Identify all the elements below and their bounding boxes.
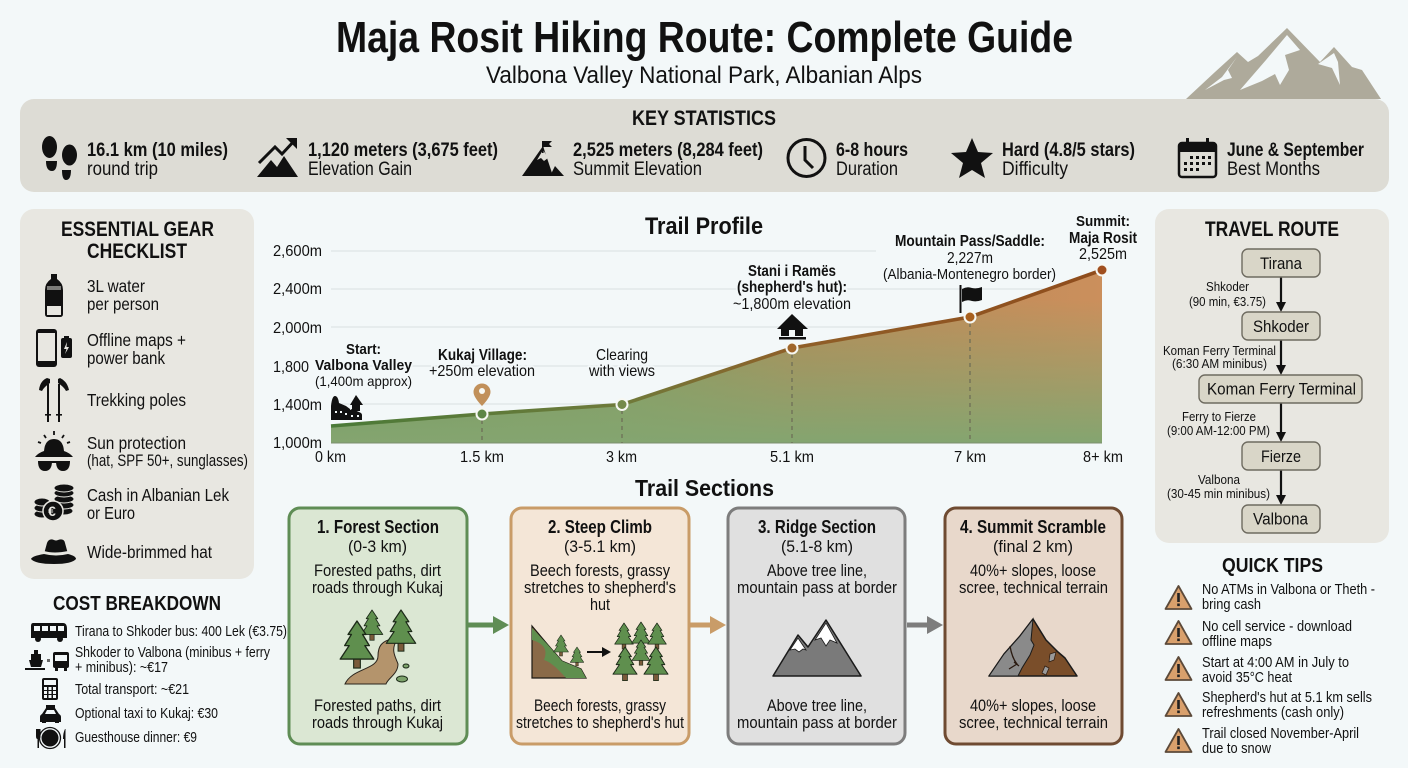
annotation: start: Valbona Valley: [315, 357, 413, 374]
panel: forest section: (0-3 km): [348, 537, 407, 556]
panel: key statistics: [20, 99, 1389, 192]
icon: forest path: [340, 610, 416, 684]
x axis labels: 0 km: [315, 449, 346, 466]
gear: wide-brimmed hat: [31, 539, 212, 564]
route leg labels: (30-45 min minibus): [1167, 486, 1270, 501]
panel: summit scramble: (final 2 km): [993, 537, 1073, 556]
gear: water: [45, 274, 159, 317]
tip: ATMs: No ATMs in Valbona or Theth -: [1202, 581, 1375, 598]
annotation: summit: 2,525m: [1079, 246, 1127, 263]
y axis labels: 2,400m: [273, 281, 322, 298]
arrow: steep climb to ridge: [690, 616, 726, 634]
annotation: summit: [1069, 213, 1138, 263]
icon: decorative mountain: [1186, 28, 1381, 99]
heading: essential gear: [61, 218, 214, 263]
panel: ridge section: mountain pass at border: [737, 713, 897, 732]
panel: summit scramble: scree, technical terrain: [959, 578, 1108, 597]
stat: summit elevation: [522, 140, 763, 180]
stop: Koman Ferry Terminal: Koman Ferry Terminal: [1207, 380, 1356, 398]
elevation area: [331, 270, 1102, 443]
tip: trail closure: [1166, 725, 1359, 757]
icon: hut: [777, 314, 808, 340]
annotation: summit: Maja Rosit: [1069, 230, 1138, 247]
cost: dinner: Guesthouse dinner: €9: [75, 729, 197, 746]
stat: best months: Best Months: [1227, 159, 1320, 180]
panel: essential gear checklist: [20, 209, 254, 579]
panel: ridge section: Above tree line,: [767, 561, 867, 580]
heading: travel route: TRAVEL ROUTE: [1205, 218, 1339, 241]
panel: ridge section: (5.1-8 km): [781, 537, 853, 556]
gear: maps and power bank: power bank: [87, 348, 165, 368]
tip: shepherd's hut: Shepherd's hut at 5.1 km sells: [1202, 689, 1372, 706]
cost: bus: [31, 623, 287, 642]
annotation: shepherd's hut: (shepherd's hut):: [737, 279, 847, 296]
annotation: kukaj village: +250m elevation: [429, 363, 535, 380]
icon: location pin: [474, 384, 490, 406]
subtitle: Valbona Valley National Park, Albanian Alps: [486, 62, 922, 89]
title: Maja Rosit Hiking Route: Complete Guide: [336, 13, 1073, 62]
stat: difficulty: [951, 138, 1135, 180]
route leg labels: (9:00 AM-12:00 PM): [1167, 423, 1270, 438]
stop: Shkoder: Shkoder: [1253, 317, 1309, 336]
stat: duration: Duration: [836, 159, 898, 180]
tip: ATMs: [1166, 581, 1375, 613]
waypoint markers: [476, 264, 1108, 420]
gear: trekking poles: Trekking poles: [87, 390, 186, 410]
y axis labels: 1,800: [273, 359, 309, 376]
tip: shepherd's hut: [1166, 689, 1372, 721]
annotation: mountain pass: (Albania-Montenegro border): [883, 266, 1056, 283]
stop: Tirana: Tirana: [1260, 254, 1302, 273]
stat: best months: June & September: [1227, 140, 1364, 161]
gear: wide-brimmed hat: Wide-brimmed hat: [87, 542, 212, 562]
stat: elevation gain: [257, 138, 498, 180]
annotation: start: [315, 341, 413, 389]
x axis labels: 8+ km: [1083, 449, 1123, 466]
tip: trail closure: Trail closed November-April: [1202, 725, 1359, 742]
panel: forest section: roads through Kukaj: [312, 713, 443, 732]
tip: early start: avoid 35°C heat: [1202, 669, 1293, 686]
panel: steep climb: [511, 508, 689, 744]
tip: cell service: [1166, 618, 1352, 650]
panel: steep climb: (3-5.1 km): [564, 537, 636, 556]
cost: minibus and ferry: Shkoder to Valbona (minibus + ferry: [75, 644, 270, 661]
heading: trail profile: Trail Profile: [645, 213, 763, 240]
stat: distance: 16.1 km (10 miles): [87, 140, 228, 161]
cost: minibus and ferry: + minibus): ~€17: [75, 659, 168, 676]
panel: cost breakdown: [25, 593, 287, 748]
annotation: kukaj village: Kukaj Village:: [438, 347, 527, 364]
icon: snowy ridge: [773, 620, 861, 676]
gear: cash: €: [48, 503, 56, 519]
heading: essential gear: CHECKLIST: [87, 240, 187, 263]
stop: Koman Ferry Terminal: [1199, 375, 1362, 403]
route arrows: [1276, 277, 1286, 505]
icon: steep slope and trees: [532, 622, 668, 681]
tip: early start: [1166, 654, 1349, 686]
cost: total transport: [42, 678, 189, 700]
gear: sun protection: [35, 431, 248, 471]
gear: water: per person: [87, 294, 159, 314]
gear: cash: or Euro: [87, 503, 135, 523]
stop: Shkoder: [1242, 312, 1320, 340]
route leg labels: [1163, 279, 1276, 501]
panel: steep climb: Beech forests, grassy: [530, 561, 670, 580]
gear: sun protection: Sun protection: [87, 433, 186, 453]
stat: distance: round trip: [87, 159, 158, 180]
stat: difficulty: Hard (4.8/5 stars): [1002, 140, 1135, 161]
panel: summit scramble: 40%+ slopes, loose: [970, 696, 1096, 715]
panel: summit scramble: 40%+ slopes, loose: [970, 561, 1096, 580]
stat: elevation gain: Elevation Gain: [308, 159, 412, 180]
tip: early start: Start at 4:00 AM in July to: [1202, 654, 1349, 671]
panel: ridge section: mountain pass at border: [737, 578, 897, 597]
gear: sun protection: (hat, SPF 50+, sunglasses): [87, 452, 248, 470]
panel: summit scramble: [945, 508, 1122, 744]
panel: steep climb: 2. Steep Climb: [548, 517, 652, 537]
y axis labels: [273, 243, 322, 452]
heading: trail sections: Trail Sections: [635, 475, 774, 501]
x axis labels: 5.1 km: [770, 449, 814, 466]
panel: summit scramble: scree, technical terrain: [959, 713, 1108, 732]
arrow: forest to steep climb: [468, 616, 509, 634]
stop: Fierze: [1242, 442, 1320, 470]
annotation: kukaj village: [429, 347, 535, 380]
panel: steep climb: Beech forests, grassy: [534, 696, 666, 715]
panel: ridge section: [728, 508, 905, 744]
y axis labels: 2,600m: [273, 243, 322, 260]
y axis labels: 1,400m: [273, 397, 322, 414]
panel: ridge section: Above tree line,: [767, 696, 867, 715]
arrow: ridge to summit: [907, 616, 943, 634]
stat: best months: [1179, 138, 1364, 180]
icon: rocky summit: [989, 619, 1077, 676]
annotation: clearing with views: Clearing: [596, 347, 648, 364]
annotation: mountain pass: Mountain Pass/Saddle:: [895, 233, 1045, 250]
stat: distance: [42, 136, 228, 180]
stop: Valbona: [1242, 505, 1320, 533]
cost: dinner: [36, 728, 197, 748]
stat: duration: [788, 140, 908, 180]
cost: taxi: [40, 705, 218, 723]
stop: Fierze: Fierze: [1261, 447, 1301, 466]
annotation: start: (1,400m approx): [315, 373, 412, 389]
route leg labels: Koman Ferry Terminal: [1163, 343, 1276, 358]
x axis labels: 3 km: [606, 449, 637, 466]
heading: essential gear: ESSENTIAL GEAR: [61, 218, 214, 241]
panel: quick tips: [1166, 555, 1375, 757]
route leg labels: (6:30 AM minibus): [1172, 356, 1267, 371]
annotation: shepherd's hut: [733, 263, 851, 313]
annotation: start: Start:: [346, 341, 381, 358]
y axis labels: 1,000m: [273, 435, 322, 452]
annotation: clearing with views: with views: [588, 363, 655, 380]
stat: duration: 6-8 hours: [836, 140, 908, 161]
route leg labels: Valbona: [1198, 472, 1241, 487]
chart: trail profile: [273, 213, 1138, 466]
cost: minibus and ferry: [25, 644, 270, 676]
panel: summit scramble: 4. Summit Scramble: [960, 517, 1106, 537]
annotation: summit: Summit:: [1076, 213, 1130, 230]
x axis labels: 7 km: [954, 449, 986, 466]
annotation: clearing with views: [588, 347, 655, 380]
stop: Tirana: [1242, 249, 1320, 277]
cost: total transport: Total transport: ~€21: [75, 681, 189, 698]
y axis labels: 2,000m: [273, 320, 322, 337]
icon: village: [331, 395, 363, 420]
elevation line: [331, 270, 1102, 426]
stat: elevation gain: 1,120 meters (3,675 feet): [308, 140, 498, 161]
heading: quick tips: QUICK TIPS: [1222, 555, 1323, 577]
stat: summit elevation: 2,525 meters (8,284 feet): [573, 140, 763, 161]
tip: ATMs: bring cash: [1202, 596, 1261, 613]
panel: forest section: Forested paths, dirt: [314, 696, 441, 715]
tip: shepherd's hut: refreshments (cash only): [1202, 704, 1344, 721]
annotation: shepherd's hut: Stani i Ramës: [748, 263, 836, 280]
heading: key statistics: KEY STATISTICS: [632, 107, 776, 130]
stat: summit elevation: Summit Elevation: [573, 159, 702, 180]
route leg labels: (90 min, €3.75): [1189, 294, 1266, 309]
cost: bus: Tirana to Shkoder bus: 400 Lek (€3.75): [75, 623, 287, 640]
annotation: mountain pass: [883, 233, 1056, 283]
x axis labels: 1.5 km: [460, 449, 504, 466]
cost: taxi: Optional taxi to Kukaj: €30: [75, 705, 218, 722]
annotation: mountain pass: 2,227m: [947, 250, 993, 267]
stop: Valbona: Valbona: [1253, 510, 1308, 528]
stat: difficulty: Difficulty: [1002, 159, 1068, 180]
panel: ridge section: 3. Ridge Section: [758, 517, 876, 537]
panel: forest section: 1. Forest Section: [317, 517, 439, 537]
panel: forest section: [289, 508, 467, 744]
gear: maps and power bank: [36, 329, 186, 368]
route leg labels: Ferry to Fierze: [1182, 409, 1256, 424]
icon: flag: [960, 285, 982, 313]
gear: maps and power bank: Offline maps +: [87, 330, 186, 350]
gear: trekking poles: [39, 378, 186, 422]
panel: forest section: Forested paths, dirt: [314, 561, 441, 580]
gear: cash: [34, 484, 229, 523]
gear: water: 3L water: [87, 276, 145, 296]
route leg labels: Shkoder: [1206, 279, 1250, 294]
gear: cash: Cash in Albanian Lek: [87, 485, 229, 505]
panel: steep climb: hut: [590, 595, 610, 614]
panel: travel route: [1155, 209, 1389, 543]
tip: cell service: offline maps: [1202, 633, 1272, 650]
annotation: shepherd's hut: ~1,800m elevation: [733, 296, 851, 313]
panel: steep climb: stretches to shepherd's: [524, 578, 676, 597]
panel: forest section: roads through Kukaj: [312, 578, 443, 597]
heading: cost breakdown: COST BREAKDOWN: [53, 593, 221, 615]
x axis labels: [315, 449, 1123, 466]
tip: cell service: No cell service - download: [1202, 618, 1352, 635]
panel: steep climb: stretches to shepherd's hut: [516, 713, 684, 732]
tip: trail closure: due to snow: [1202, 740, 1271, 757]
